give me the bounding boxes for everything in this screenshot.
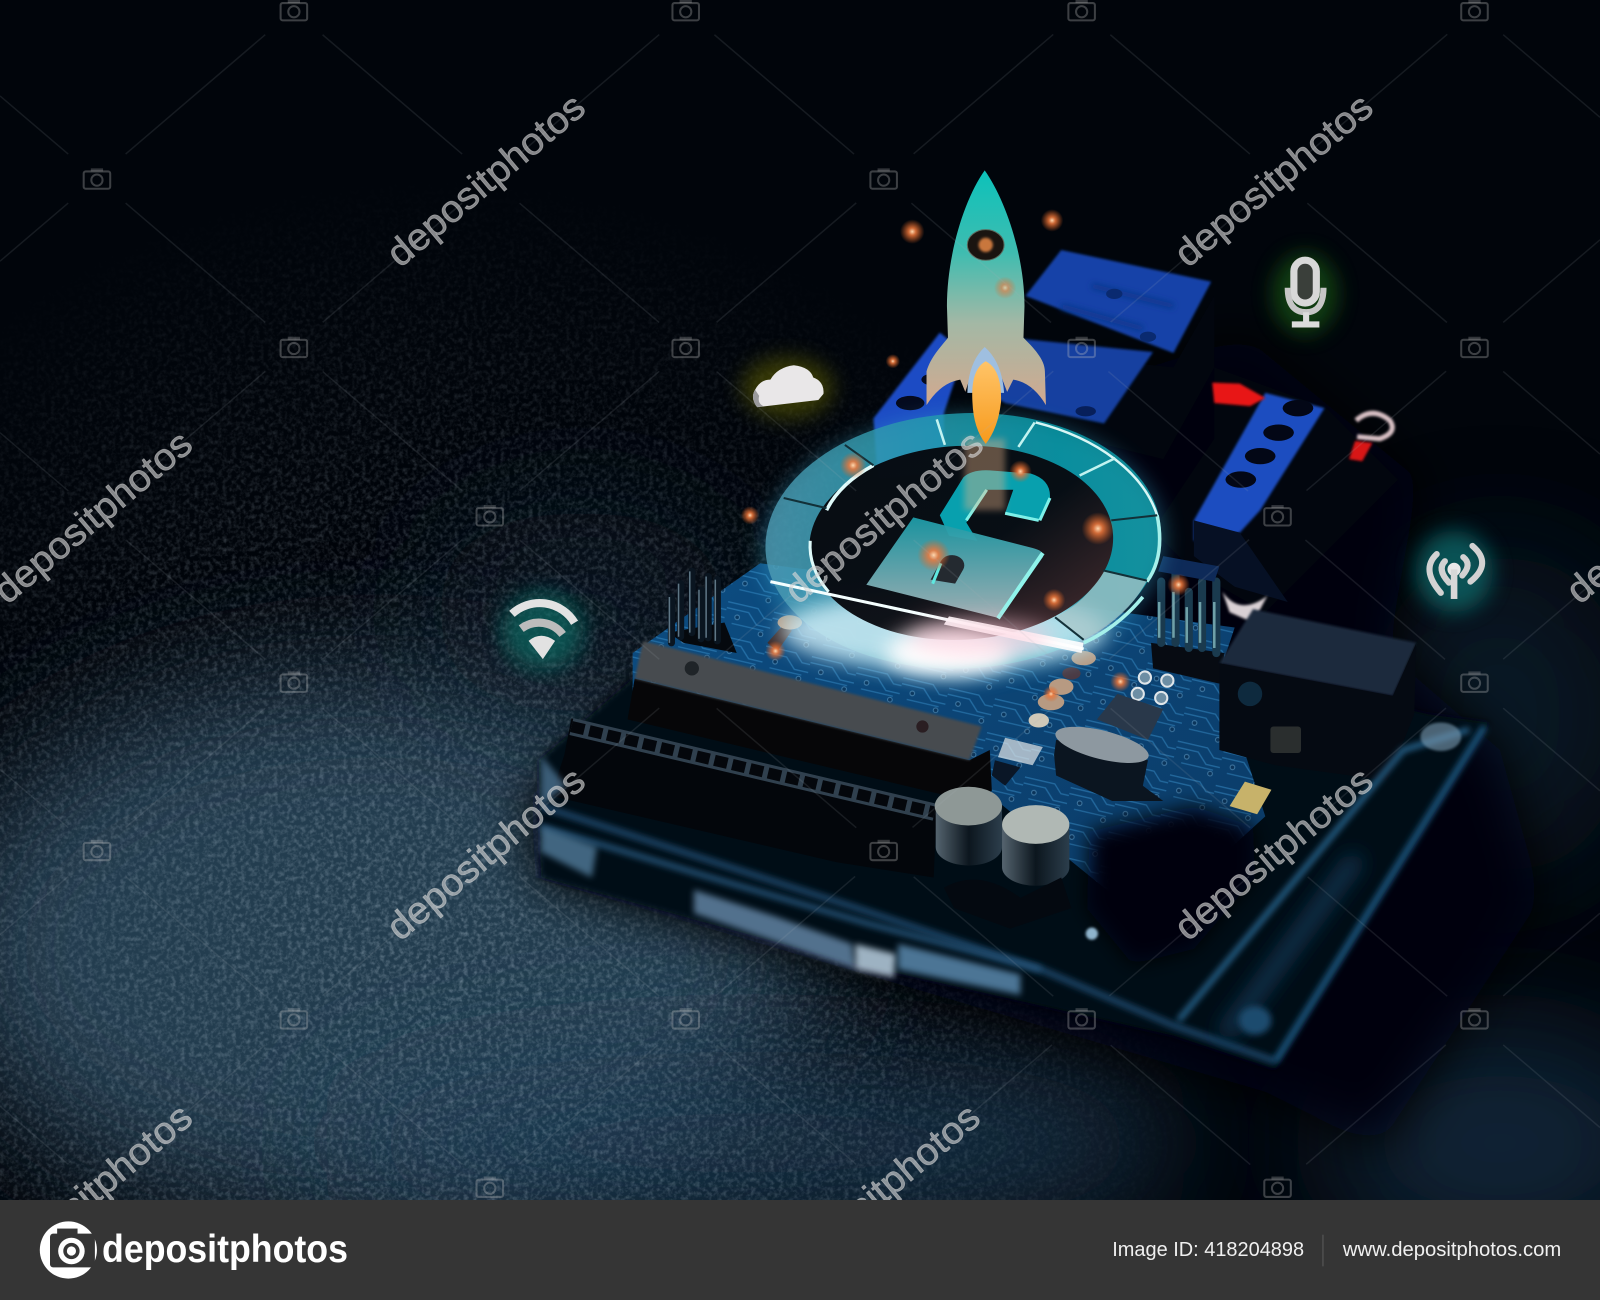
pin socket: [551, 718, 937, 878]
image id: Image ID: 418204898: [1112, 1239, 1304, 1261]
sparks: [741, 209, 1190, 702]
bright diagonal beam: [770, 582, 1084, 649]
website: www.depositphotos.com: [1342, 1239, 1561, 1261]
icon: cloud: [742, 357, 834, 418]
lock icon: [866, 470, 1050, 618]
core flare: [886, 631, 1012, 676]
keyhole: [931, 555, 964, 584]
left terminal block: [873, 333, 964, 480]
jumper pads: [1132, 671, 1173, 704]
watermark text: depositphotos: [773, 1095, 988, 1285]
watermark text: depositphotos: [776, 422, 991, 611]
relay lower block: [944, 332, 1153, 423]
usb socket: [1219, 609, 1416, 781]
icon: wifi: [502, 592, 584, 669]
crystal oscillator: [1052, 719, 1163, 801]
white pads: [998, 738, 1043, 765]
watermark text: depositphotos: [1166, 85, 1381, 275]
relay top block: [1026, 250, 1211, 353]
rocket: [927, 170, 1046, 510]
smd leds: [767, 615, 1096, 728]
acrylic base: [539, 577, 1490, 1069]
ring lower right panel: [1055, 570, 1147, 640]
small chip: [1097, 694, 1163, 740]
board cast shadow: [531, 337, 1541, 1148]
yellow component: [1230, 782, 1271, 814]
lock shackle: [940, 470, 1050, 541]
rocket window: [967, 230, 1004, 260]
flame: [972, 361, 1001, 444]
inner disc: [804, 438, 1118, 648]
header pins right: [1151, 556, 1224, 684]
acrylic edges: [541, 722, 1485, 1061]
logo wordmark: depositphotos: [102, 1228, 348, 1271]
ring band: [759, 403, 1168, 679]
watermark text: depositphotos: [378, 85, 593, 275]
red wires: [1212, 383, 1392, 622]
ring outer right highlight: [1036, 422, 1157, 515]
header pins left: [668, 571, 737, 653]
circuit board: [633, 563, 1265, 923]
right terminal block: [1194, 393, 1324, 602]
icon: antenna: [1415, 531, 1493, 612]
footer divider: [1322, 1235, 1323, 1266]
watermark text: depositphotos: [378, 759, 593, 948]
exhaust beam: [964, 439, 1005, 510]
lock body: [866, 517, 1043, 618]
inner ring highlights: [827, 465, 873, 510]
outer glow: [755, 405, 1172, 687]
logo badge: [40, 1221, 97, 1279]
microcontroller chip: [628, 641, 992, 801]
footer bar: [0, 1200, 1600, 1300]
ring lower light: [781, 592, 1107, 669]
nozzle: [967, 347, 1004, 393]
ring segment dividers: [937, 419, 1115, 476]
capacitors: [935, 787, 1071, 929]
pcb traces: [633, 563, 1265, 923]
power jack: [1087, 806, 1255, 964]
icon: microphone: [1272, 253, 1338, 335]
watermark text: depositphotos: [1166, 759, 1381, 948]
rocket body: [927, 170, 1046, 405]
relay module: [873, 250, 1398, 622]
hologram ring: [755, 403, 1172, 687]
